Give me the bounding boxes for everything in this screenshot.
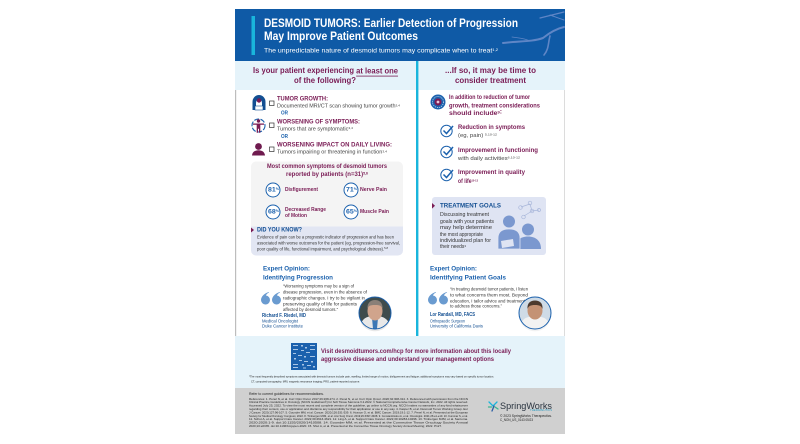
item: reduction in symptoms: 5,10-12 — [485, 133, 497, 137]
text: or: OR — [281, 134, 288, 140]
stat: disfigurement: Disfigurement — [285, 187, 318, 193]
marker — [432, 203, 435, 209]
attribution: Richard F. Riedel, MD — [262, 313, 306, 319]
item: improvement in quality of life: Improvement in quality — [458, 170, 526, 176]
stat: decreased range of motion: Decreased Range — [285, 207, 326, 213]
item: improvement in functioning — [441, 146, 538, 162]
quote text — [283, 284, 368, 312]
stat: decreased range of motion: 68 — [268, 208, 275, 216]
panel: left column heading: Is your patient experiencing at least one — [253, 66, 399, 75]
stat: disfigurement: % — [276, 187, 280, 191]
item: reduction in symptoms: Reduction in symptoms — [458, 125, 526, 131]
panel: treatment goals: TREATMENT GOALS — [440, 202, 502, 210]
panel: right column heading — [418, 61, 565, 90]
quote text: education, I tailor advice and treatment — [450, 298, 526, 304]
title: May Improve Patient Outcomes — [264, 31, 418, 43]
body text: the most appropriate — [440, 232, 483, 238]
heading — [267, 164, 388, 178]
stat: nerve pain — [344, 183, 387, 197]
references: regarding their content, use or application and disclaims any responsibility for their application or use in any way. 4. Kasper B, et al. Desmoid Tumor Working Group. Eur — [249, 407, 468, 411]
subtitle: The unpredictable nature of desmoid tumors may complicate when to treat — [264, 48, 488, 54]
heading: Most common symptoms of desmoid tumors — [267, 164, 388, 170]
subtitle: 1,2 — [492, 46, 499, 52]
checklist item: worsening impact on daily living: Tumors impairing or threatening in function — [277, 150, 372, 156]
body text: associated with worse outcomes for the patient (eg, progression-free survival, — [257, 240, 400, 246]
stat: decreased range of motion: of Motion — [285, 213, 307, 219]
title: DESMOID TUMORS: Earlier Detection of Progression — [264, 18, 518, 30]
panel: expert opinion left: Identifying Progression — [263, 274, 333, 282]
references: References: 1. Penel N, et al. Curr Opin Oncol. 2017;29:268-274. 2. Penel N, et al. Curr Opin Oncol. 2020;32:308-314. 3. Referenced with permission from the NCCN — [249, 397, 468, 401]
icon: quotation marks — [261, 292, 281, 304]
attribution: Duke Cancer Institute — [262, 324, 303, 328]
icon: check — [441, 125, 453, 137]
QR code — [291, 343, 317, 370]
panel: expert opinion right: Identifying Patient Goals — [430, 274, 506, 282]
icon: body in ring — [252, 119, 265, 133]
checklist item: tumor growth: 3,4 — [395, 103, 400, 107]
panel: expert opinion left — [261, 266, 391, 331]
icon: check — [441, 146, 453, 158]
panel: did you know — [251, 226, 403, 256]
references: Accessed July 25, 2022. To view the most recent and complete version of the guideline, go online to NCCN.org. NCCN makes no warranties of any kind whatsoever — [249, 404, 468, 408]
guideline note: Refer to current guidelines for recommendations. — [249, 392, 324, 396]
panel: treatment considerations: should include — [449, 111, 491, 117]
icon: check — [441, 169, 453, 181]
item: improvement in functioning: Improvement in functioning — [458, 148, 538, 154]
marker — [251, 228, 254, 232]
item: reduction in symptoms: (eg, pain) — [458, 133, 479, 139]
icon: doctor and patient — [498, 216, 541, 249]
icon: person silhouette — [252, 143, 265, 156]
item: improvement in functioning: 6,10-12 — [508, 156, 520, 160]
references: 11. Schut A, et al. Support Care Cancer. 2022;30:4613-4621. 12. Ling A, et al. Support Care Cancer. 2022;30:10283-10296. 13. Timbergen MJM, et al. Sarcoma. — [249, 417, 468, 421]
panel: left column heading — [235, 61, 417, 90]
references: 2020;2020:1-9. doi:10.1155/2020/1410508. 14. Gounder MM, et al. Presented at the Connective Tissue Oncology Society Annual — [249, 421, 468, 425]
stat: nerve pain: 71 — [346, 186, 353, 194]
checklist item: worsening impact on daily living: WORSENING IMPACT ON DAILY LIVING: — [277, 143, 392, 149]
footnote — [249, 374, 494, 384]
references: Society for Medical Oncology Congress; 2022. 8. Timbergen MJM, et al. Ann Surg Oncol. 2019;26:3397-3408. 9. Constantinidou A, et al. Oncologist. 2021;26:e1-e10. 10. Kummar S, et al. — [249, 414, 468, 418]
stat: muscle pain: 65 — [346, 208, 353, 216]
body text: Discussing treatment — [440, 212, 490, 218]
panel: expert opinion right — [428, 266, 551, 331]
item: improvement in quality of life — [441, 169, 526, 185]
quote text: “Worsening symptoms may be a sign of — [283, 284, 355, 288]
column divider — [416, 61, 418, 337]
stat: muscle pain: Muscle Pain — [360, 209, 389, 215]
body text: poor quality of life, functional impairment, and psychological distress). — [257, 246, 398, 252]
checklist item: worsening impact on daily living: 3,4 — [382, 149, 387, 153]
portrait — [519, 297, 551, 331]
attribution — [430, 312, 484, 328]
attribution: Orthopaedic Surgeon — [430, 318, 465, 324]
heading: 5,6 — [363, 172, 368, 176]
heading: reported by patients (n=31) — [286, 172, 363, 178]
footnote: *The most frequently described symptoms associated with desmoid tumors include pain, swelling, limited range of motion, disfigurement and fatigue; additional symptoms may vary based on specific tumor location. — [249, 374, 494, 378]
panel: left column heading: of the following? — [294, 76, 356, 85]
logo: SpringWorks: THERAPEUTICS — [530, 408, 552, 412]
quote text: to address those concerns.” — [450, 304, 502, 308]
checklist item: tumor growth: Documented MRI/CT scan showing tumor growth — [277, 104, 386, 110]
body text: 3 — [464, 244, 466, 248]
checkbox — [270, 147, 274, 152]
panel: treatment considerations: : — [500, 110, 502, 116]
checklist item: worsening of symptoms: Tumors that are symptomatic — [277, 126, 342, 132]
panel: treatment considerations: growth, treatment considerations — [449, 104, 541, 110]
item: improvement in quality of life: of life — [458, 179, 474, 185]
stat: disfigurement — [266, 183, 318, 197]
panel: treatment considerations: 9 — [497, 111, 500, 115]
attribution: University of California Davis — [430, 324, 484, 328]
logo: SpringWorks: SpringWorks — [500, 401, 552, 411]
references: Clinical Practice Guidelines in Oncology (NCCN Guidelines®) for Soft Tissue Sarcoma V.2.2022. © National Comprehensive Cancer Network, Inc. 2022. All rights reserved. — [249, 400, 468, 404]
stat: nerve pain: Nerve Pain — [360, 187, 387, 193]
attribution — [262, 313, 306, 328]
checklist item: worsening impact on daily living — [252, 143, 392, 156]
references — [249, 397, 468, 428]
stat: decreased range of motion — [266, 205, 326, 219]
copyright: C_NON_US_0143 05/23 — [500, 418, 533, 422]
icon: scan machine — [252, 95, 266, 110]
references: J Cancer. 2020;127:96-107. 5. Gounder MM, et al. Cancer. 2020;126:531-539. 6. Husson O, et al. BMC Cancer. 2019;19:1-12. 7. Penel N, et al. Presented at the European — [249, 410, 468, 414]
body text: goals with your patients — [440, 219, 495, 225]
text: visit site — [321, 348, 511, 363]
stat: muscle pain — [344, 205, 389, 219]
copyright: © 2023 SpringWorks Therapeutics. — [500, 414, 552, 418]
panel: footer — [235, 388, 565, 434]
checklist item: tumor growth — [252, 95, 400, 110]
item: improvement in quality of life: 10-13 — [472, 179, 478, 183]
stat: disfigurement: 81 — [268, 186, 275, 194]
attribution: Lor Randall, MD, FACS — [430, 312, 476, 318]
icon: quotation marks — [428, 292, 448, 304]
header banner — [235, 9, 565, 61]
stat: nerve pain: % — [354, 187, 358, 191]
checkbox — [270, 123, 274, 128]
body text — [440, 212, 495, 250]
attribution: Medical Oncologist — [262, 318, 299, 324]
stat: muscle pain: % — [354, 209, 358, 213]
footnote: CT, computed tomography; MRI, magnetic resonance imaging; PRO, patient-reported outcome. — [251, 380, 360, 384]
text: visit site: aggressive disease and understand your management options — [321, 356, 494, 363]
panel: right column heading: ...If so, it may be time to — [445, 66, 536, 75]
body text: may help determine — [440, 225, 492, 231]
panel: treatment considerations: In addition to reduction of tumor — [449, 95, 531, 101]
quote text: to what concerns them most. Beyond — [450, 292, 528, 298]
quote text — [450, 286, 528, 308]
checkbox — [270, 101, 274, 106]
stat: decreased range of motion: % — [276, 209, 280, 213]
checklist item: tumor growth: TUMOR GROWTH: — [277, 96, 328, 102]
panel: most common symptoms — [251, 162, 403, 234]
body text: Evidence of pain can be a prognostic indicator of progression and has been — [257, 234, 394, 240]
quote text: affected by desmoid tumors.” — [283, 307, 338, 312]
checklist item: worsening of symptoms: WORSENING OF SYMPTOMS: — [277, 120, 360, 126]
checklist item: worsening of symptoms — [252, 119, 360, 133]
text: visit site: Visit desmoidtumors.com/hcp for more information about this locally — [321, 348, 511, 355]
panel: expert opinion left: Expert Opinion: — [263, 266, 310, 272]
panel: call to action band — [235, 336, 565, 388]
quote text: disease progression, even in the absence of — [283, 290, 368, 294]
header accent bar — [252, 16, 255, 55]
checklist item: worsening of symptoms: 3,4 — [348, 126, 353, 130]
panel: expert opinion right: Expert Opinion: — [430, 266, 477, 272]
portrait — [359, 297, 391, 331]
title — [264, 18, 518, 43]
panel: treatment considerations — [430, 94, 541, 185]
body text: their needs — [440, 244, 465, 250]
panel: right column heading: consider treatment — [455, 76, 526, 85]
references: 2020;10:e0335. doi:10.1136/bmjopen-2020. 15. Shut A, et al. Presented at the Connective Tissue Oncology Society Annual Meeting; 2022. P127. — [249, 424, 442, 428]
icon: network — [519, 201, 540, 219]
item: reduction in symptoms — [441, 125, 526, 139]
quote text: radiographic changes. I try to be vigilant in — [283, 296, 365, 300]
quote text: preserving quality of life for patients — [283, 302, 358, 306]
item: improvement in functioning: with daily activities — [458, 156, 499, 162]
quote text: “In treating desmoid tumor patients, I listen — [450, 286, 528, 292]
body text — [257, 234, 400, 252]
panel: treatment goals — [432, 197, 546, 255]
text: or: OR — [281, 111, 288, 117]
icon: target cell — [430, 94, 446, 110]
panel: did you know: DID YOU KNOW? — [257, 226, 302, 234]
body text: individualized plan for — [440, 238, 491, 244]
copyright — [500, 414, 552, 422]
body text: 5-8 — [384, 246, 388, 250]
